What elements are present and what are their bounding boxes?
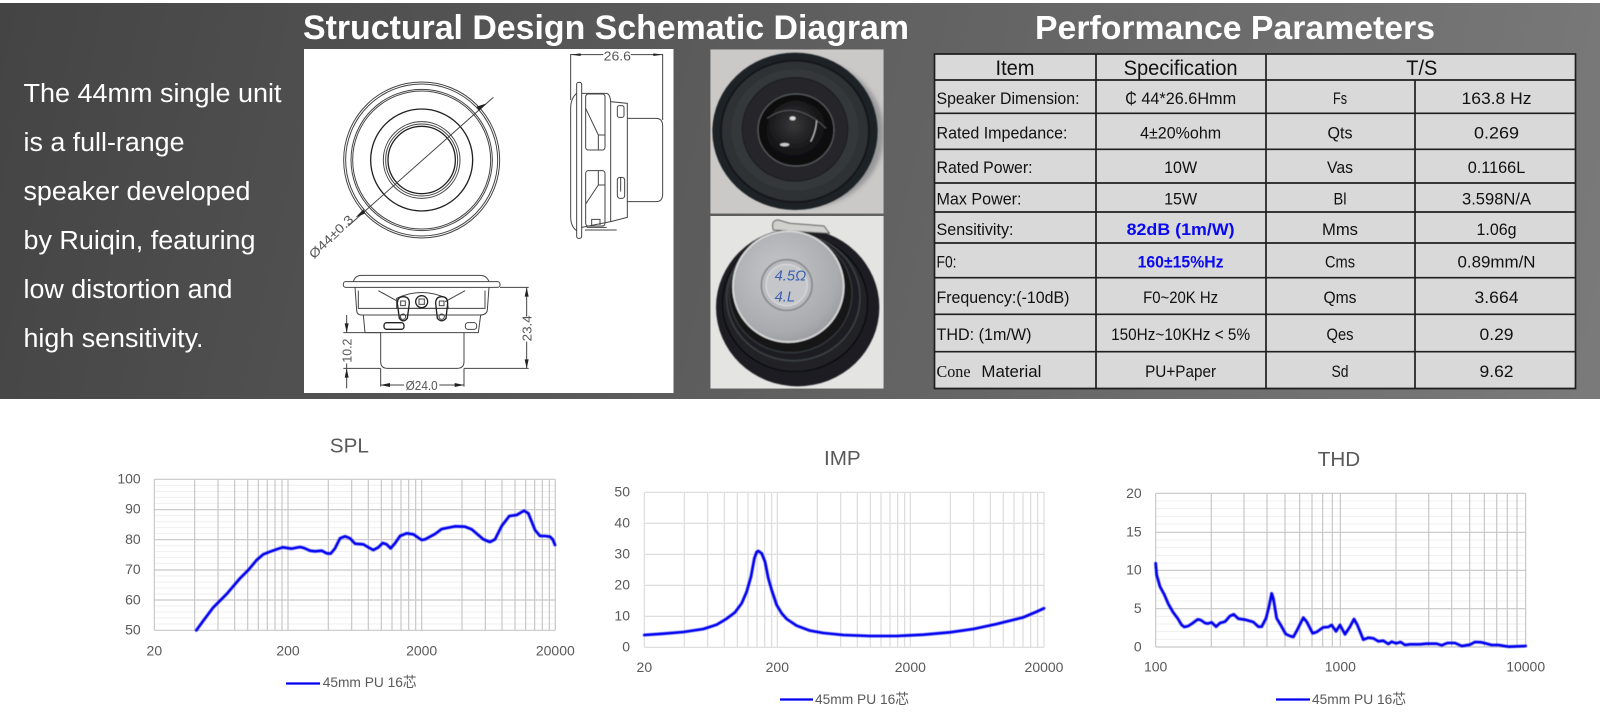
drawing: front view rings xyxy=(306,82,500,261)
intro text block xyxy=(24,80,282,353)
IMP axis labels: 50 xyxy=(614,483,630,499)
row: speaker dimension: Fs xyxy=(1333,90,1347,108)
panel: schematic drawing xyxy=(304,49,674,393)
row: rated impedance: Qts xyxy=(1328,125,1352,143)
row: rated power: Rated Power: xyxy=(936,159,1032,177)
drawing: bottom view xyxy=(340,275,534,393)
row: cone material: PU+Paper xyxy=(1145,363,1217,381)
SPL axis labels: 60 xyxy=(125,591,141,607)
handwritten label xyxy=(774,270,806,302)
row: frequency: F0~20K Hz xyxy=(1143,289,1218,307)
legend: THD: 45mm PU 16芯 xyxy=(1312,691,1406,707)
row: frequency: Frequency:(-10dB) xyxy=(936,289,1070,307)
row: rated power: Vas xyxy=(1327,159,1353,177)
SPL axis labels: 80 xyxy=(125,531,141,547)
row: F0 xyxy=(936,254,1536,272)
photo: speaker front xyxy=(710,49,884,214)
SPL axis labels: 20 xyxy=(147,642,162,658)
row: cone material xyxy=(936,362,1514,381)
IMP axis labels: 2000 xyxy=(895,659,926,675)
row: rated impedance: 0.269 xyxy=(1474,124,1519,143)
row: cone material: Cone xyxy=(936,362,970,381)
row: F0: 160±15%Hz xyxy=(1138,254,1224,272)
row: THD: 0.29 xyxy=(1480,325,1514,344)
SPL axis labels xyxy=(117,471,575,658)
IMP axis labels xyxy=(614,483,1064,675)
parameters table xyxy=(934,54,1576,388)
row: THD: Qes xyxy=(1326,326,1354,344)
handwritten label: 4.5Ω xyxy=(775,269,806,285)
intro text block: low distortion and xyxy=(24,276,232,304)
IMP axis labels: 0 xyxy=(622,638,630,654)
THD axis labels: 15 xyxy=(1126,523,1142,539)
heading: structural design: Structural Design Schematic Diagram xyxy=(303,9,909,47)
row: rated impedance: Rated Impedance: xyxy=(936,125,1068,143)
IMP axis labels: 20000 xyxy=(1025,659,1064,675)
row: max power: Bl xyxy=(1334,191,1346,209)
row: rated power xyxy=(936,159,1525,177)
IMP axis labels: 20 xyxy=(637,659,652,675)
row: sensitivity: Mms xyxy=(1322,221,1358,239)
table header row xyxy=(996,57,1437,80)
SPL axis labels: 90 xyxy=(125,501,141,517)
row: THD: 150Hz~10KHz < 5% xyxy=(1111,326,1250,344)
row: THD: THD: (1m/W) xyxy=(936,326,1032,344)
SPL axis labels: 200 xyxy=(276,642,300,658)
IMP axis labels: 200 xyxy=(766,659,789,675)
drawing: side view xyxy=(571,50,663,238)
IMP curve xyxy=(644,551,1044,636)
row: frequency: 3.664 xyxy=(1474,288,1518,307)
THD axis labels: 100 xyxy=(1144,659,1168,675)
SPL axis labels: 50 xyxy=(125,622,141,638)
row: max power: Max Power: xyxy=(936,191,1022,209)
THD curve xyxy=(1156,563,1526,647)
SPL axis labels: 2000 xyxy=(406,642,437,658)
row: rated power: 0.1166L xyxy=(1468,159,1525,177)
chart: THD xyxy=(1126,448,1545,675)
row: speaker dimension: 163.8 Hz xyxy=(1462,89,1532,108)
heading: performance parameters: Performance Parameters xyxy=(1035,9,1435,46)
table header row: Specification xyxy=(1124,57,1238,80)
drawing: bottom view: Ø24.0 xyxy=(406,379,438,393)
THD axis labels: 20 xyxy=(1126,485,1142,501)
row: cone material: Sd xyxy=(1332,363,1348,381)
row: THD xyxy=(936,325,1514,344)
SPL axis labels: 70 xyxy=(125,561,141,577)
row: F0: F0: xyxy=(936,254,956,272)
row: sensitivity xyxy=(936,221,1516,239)
intro text block: The 44mm single unit xyxy=(24,80,282,108)
table header row: T/S xyxy=(1406,57,1437,80)
chart title: SPL: SPL xyxy=(330,434,369,457)
chart title: THD: THD xyxy=(1318,448,1360,471)
row: frequency: Qms xyxy=(1324,289,1356,307)
IMP axis labels: 10 xyxy=(614,607,630,623)
row: sensitivity: 82dB (1m/W) xyxy=(1127,221,1235,239)
THD axis labels: 10 xyxy=(1126,562,1142,578)
row: sensitivity: 1.06g xyxy=(1476,221,1516,239)
drawing: front view rings: Ø44±0.3 xyxy=(306,213,356,261)
intro text block: speaker developed xyxy=(24,178,250,206)
legend: SPL: 45mm PU 16芯 xyxy=(323,674,417,690)
handwritten label: 4.L xyxy=(775,290,795,306)
IMP axis labels: 20 xyxy=(614,576,630,592)
panel: speaker photos xyxy=(710,49,884,389)
row: max power xyxy=(936,191,1531,209)
drawing: bottom view: 10.2 xyxy=(340,339,354,363)
THD axis labels xyxy=(1126,485,1545,675)
photo: speaker back xyxy=(710,216,884,389)
SPL curve xyxy=(196,511,555,630)
row: max power: 3.598N/A xyxy=(1462,191,1531,209)
drawing: side view: 26.6 xyxy=(604,50,631,64)
row: rated impedance: 4±20%ohm xyxy=(1140,125,1221,143)
row: rated power: 10W xyxy=(1164,159,1198,177)
chart: SPL xyxy=(117,434,575,658)
IMP axis labels: 30 xyxy=(614,545,630,561)
intro text block: by Ruiqin, featuring xyxy=(24,227,256,255)
row: frequency xyxy=(936,288,1518,307)
THD axis labels: 0 xyxy=(1134,638,1142,654)
row: max power: 15W xyxy=(1164,191,1198,209)
header band background xyxy=(0,3,1600,399)
table grid xyxy=(934,54,1576,388)
row: speaker dimension: ₵ 44*26.6Hmm xyxy=(1125,90,1236,108)
SPL axis labels: 20000 xyxy=(536,642,575,658)
row: F0: 0.89mm/N xyxy=(1458,254,1536,272)
intro text block: high sensitivity. xyxy=(24,325,204,353)
THD axis labels: 1000 xyxy=(1325,659,1356,675)
row: speaker dimension xyxy=(936,89,1532,108)
IMP axis labels: 40 xyxy=(614,514,630,530)
THD axis labels: 5 xyxy=(1134,600,1142,616)
legend: IMP: 45mm PU 16芯 xyxy=(815,691,909,707)
row: sensitivity: Sensitivity: xyxy=(936,221,1014,239)
chart: IMP xyxy=(614,447,1064,675)
table header row: Item xyxy=(996,57,1034,80)
row: rated impedance xyxy=(936,124,1519,143)
row: F0: Cms xyxy=(1325,254,1355,272)
chart title: IMP: IMP xyxy=(824,447,861,470)
row: cone material: 9.62 xyxy=(1480,362,1514,381)
intro text block: is a full-range xyxy=(24,129,184,157)
THD axis labels: 10000 xyxy=(1506,659,1545,675)
row: speaker dimension: Speaker Dimension: xyxy=(936,90,1080,108)
drawing: bottom view: 23.4 xyxy=(520,315,534,341)
row: cone material: Material xyxy=(981,363,1041,381)
SPL axis labels: 100 xyxy=(117,471,141,487)
